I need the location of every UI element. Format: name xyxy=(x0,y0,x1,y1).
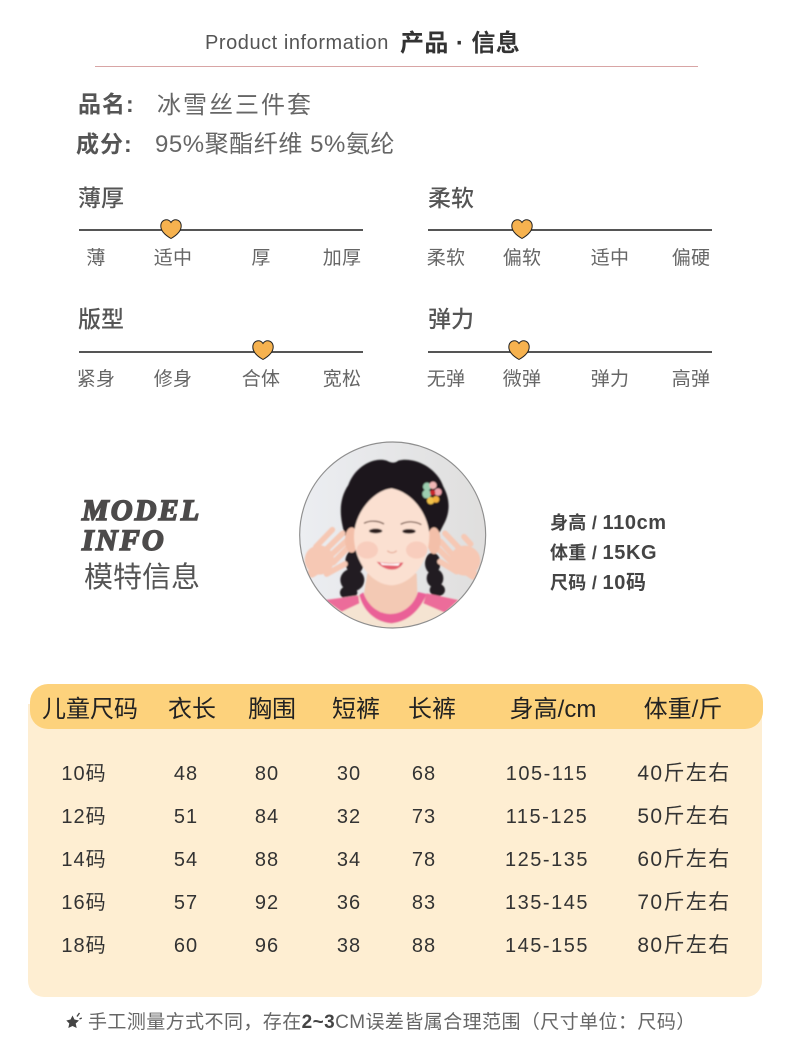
table row 18码 xyxy=(61,934,731,957)
stat: height: 身高 / 110cm xyxy=(550,512,667,534)
heading: thickness: 薄厚 xyxy=(78,185,124,211)
label 弹力: 弹力 xyxy=(591,369,629,390)
panel: elasticity xyxy=(427,306,712,390)
portrait of model xyxy=(299,441,486,629)
model stats xyxy=(550,512,667,594)
label 薄: 薄 xyxy=(86,248,106,269)
col: shorts: 短裤 xyxy=(332,696,380,723)
size table xyxy=(28,684,763,997)
table row 14码 xyxy=(61,848,731,871)
heading: softness: 柔软 xyxy=(428,185,474,211)
table header labels xyxy=(42,696,722,723)
label 柔软: 柔软 xyxy=(427,248,465,269)
face xyxy=(354,488,429,585)
table row 12码: 84 xyxy=(255,806,279,828)
table row 18码: 88 xyxy=(412,935,436,957)
table row 16码: 83 xyxy=(412,892,436,914)
label 偏硬: 偏硬 xyxy=(672,248,710,269)
table row 12码: 12码 xyxy=(61,806,107,828)
right hand xyxy=(439,533,480,576)
table row 18码: 145-155 xyxy=(505,935,589,957)
right braid xyxy=(425,553,445,596)
col: height: 身高/cm xyxy=(510,696,596,723)
footnote xyxy=(66,1012,696,1033)
heading: fit: 版型 xyxy=(78,306,124,332)
label 微弹: 微弹 xyxy=(503,369,541,390)
title english: Product information xyxy=(205,32,389,54)
table row 14码: 78 xyxy=(412,849,436,871)
composition row xyxy=(76,131,395,158)
table row 18码: 80斤左右 xyxy=(637,934,731,957)
label 厚: 厚 xyxy=(251,248,271,269)
mouth xyxy=(377,562,403,570)
table row 10码: 48 xyxy=(174,763,198,785)
product name label: 品名: xyxy=(78,91,135,117)
table row 12码: 50斤左右 xyxy=(637,805,731,828)
product name row xyxy=(78,91,313,119)
label 加厚: 加厚 xyxy=(323,248,361,269)
table row 10码: 80 xyxy=(255,763,279,785)
label 修身: 修身 xyxy=(154,369,192,390)
footnote text: 手工测量方式不同，存在2~3CM误差皆属合理范围（尺寸单位：尺码） xyxy=(88,1012,696,1033)
table row 16码: 16码 xyxy=(61,892,107,914)
table row 12码: 51 xyxy=(174,806,198,828)
table row 10码: 105-115 xyxy=(506,763,588,785)
table row 12码: 73 xyxy=(412,806,436,828)
product name value: 冰雪丝三件套 xyxy=(157,92,313,119)
heading: elasticity: 弹力 xyxy=(428,306,474,332)
stat: weight: 体重 / 15KG xyxy=(550,542,657,564)
nose xyxy=(387,551,397,553)
col: length: 衣长 xyxy=(168,696,216,723)
stat: size: 尺码 / 10码 xyxy=(550,572,647,594)
table row 14码: 34 xyxy=(337,849,361,871)
left hand xyxy=(305,530,348,575)
panel: thickness xyxy=(78,185,363,269)
icon: heart marker xyxy=(508,340,530,360)
col: trousers: 长裤 xyxy=(408,696,456,723)
table row 16码: 36 xyxy=(337,892,361,914)
slider line xyxy=(428,351,712,353)
composition value: 95%聚酯纤维 5%氨纶 xyxy=(155,131,395,158)
table row 14码: 14码 xyxy=(61,849,107,871)
table row 16码: 135-145 xyxy=(505,892,589,914)
composition label: 成分: xyxy=(76,131,133,157)
label 适中: 适中 xyxy=(591,248,629,269)
table row 14码: 60斤左右 xyxy=(637,848,731,871)
cheeks xyxy=(357,541,378,559)
table row 16码: 92 xyxy=(255,892,279,914)
slider line xyxy=(79,229,363,231)
table row 16码: 57 xyxy=(174,892,198,914)
table row 12码: 115-125 xyxy=(506,806,588,828)
table row 14码: 125-135 xyxy=(505,849,589,871)
label 宽松: 宽松 xyxy=(323,369,361,390)
heading: 模特信息: 模特信息 xyxy=(84,562,200,594)
icon: heart marker xyxy=(511,219,533,239)
shirt xyxy=(332,594,458,628)
ears xyxy=(345,527,358,553)
label 高弹: 高弹 xyxy=(672,369,710,390)
label 偏软: 偏软 xyxy=(503,248,541,269)
table row 16码: 70斤左右 xyxy=(637,891,731,914)
label 无弹: 无弹 xyxy=(427,369,465,390)
left braid xyxy=(340,549,364,600)
title rule xyxy=(95,66,698,67)
title xyxy=(205,30,520,57)
neck xyxy=(364,573,417,614)
model info heading xyxy=(80,494,201,594)
table row 18码: 38 xyxy=(337,935,361,957)
heading: MODEL: MODEL xyxy=(82,494,201,527)
table row 10码 xyxy=(61,762,731,785)
table row 12码: 32 xyxy=(337,806,361,828)
label 适中: 适中 xyxy=(154,248,192,269)
icon: star xyxy=(66,1012,82,1028)
table row 10码: 40斤左右 xyxy=(637,762,731,785)
label 紧身: 紧身 xyxy=(77,369,115,390)
col: size: 儿童尺码 xyxy=(42,696,138,723)
panel: fit xyxy=(77,306,363,390)
eyes xyxy=(369,529,382,533)
collar xyxy=(359,592,427,623)
col: weight: 体重/斤 xyxy=(644,696,722,723)
table body xyxy=(28,704,762,997)
table row 14码: 54 xyxy=(174,849,198,871)
col: chest: 胸围 xyxy=(248,696,296,723)
slider line xyxy=(428,229,712,231)
table header xyxy=(30,684,763,729)
table row 18码: 96 xyxy=(255,935,279,957)
icon: heart marker xyxy=(252,340,274,360)
table row 12码 xyxy=(61,805,731,828)
table row 18码: 60 xyxy=(174,935,198,957)
back hair xyxy=(341,460,449,542)
slider line xyxy=(79,351,363,353)
table row 18码: 18码 xyxy=(61,935,107,957)
sleeves xyxy=(325,593,458,613)
icon: heart marker xyxy=(160,219,182,239)
table row 10码: 10码 xyxy=(61,763,107,785)
brows xyxy=(364,521,421,525)
heading: INFO: INFO xyxy=(82,524,166,557)
label 合体: 合体 xyxy=(242,369,280,390)
table row 10码: 30 xyxy=(337,763,361,785)
table row 10码: 68 xyxy=(412,763,436,785)
table row 16码 xyxy=(61,891,731,914)
flower hair clip xyxy=(422,482,442,504)
title chinese: 产品 · 信息 xyxy=(400,30,520,57)
table row 14码: 88 xyxy=(255,849,279,871)
panel: softness xyxy=(427,185,712,269)
